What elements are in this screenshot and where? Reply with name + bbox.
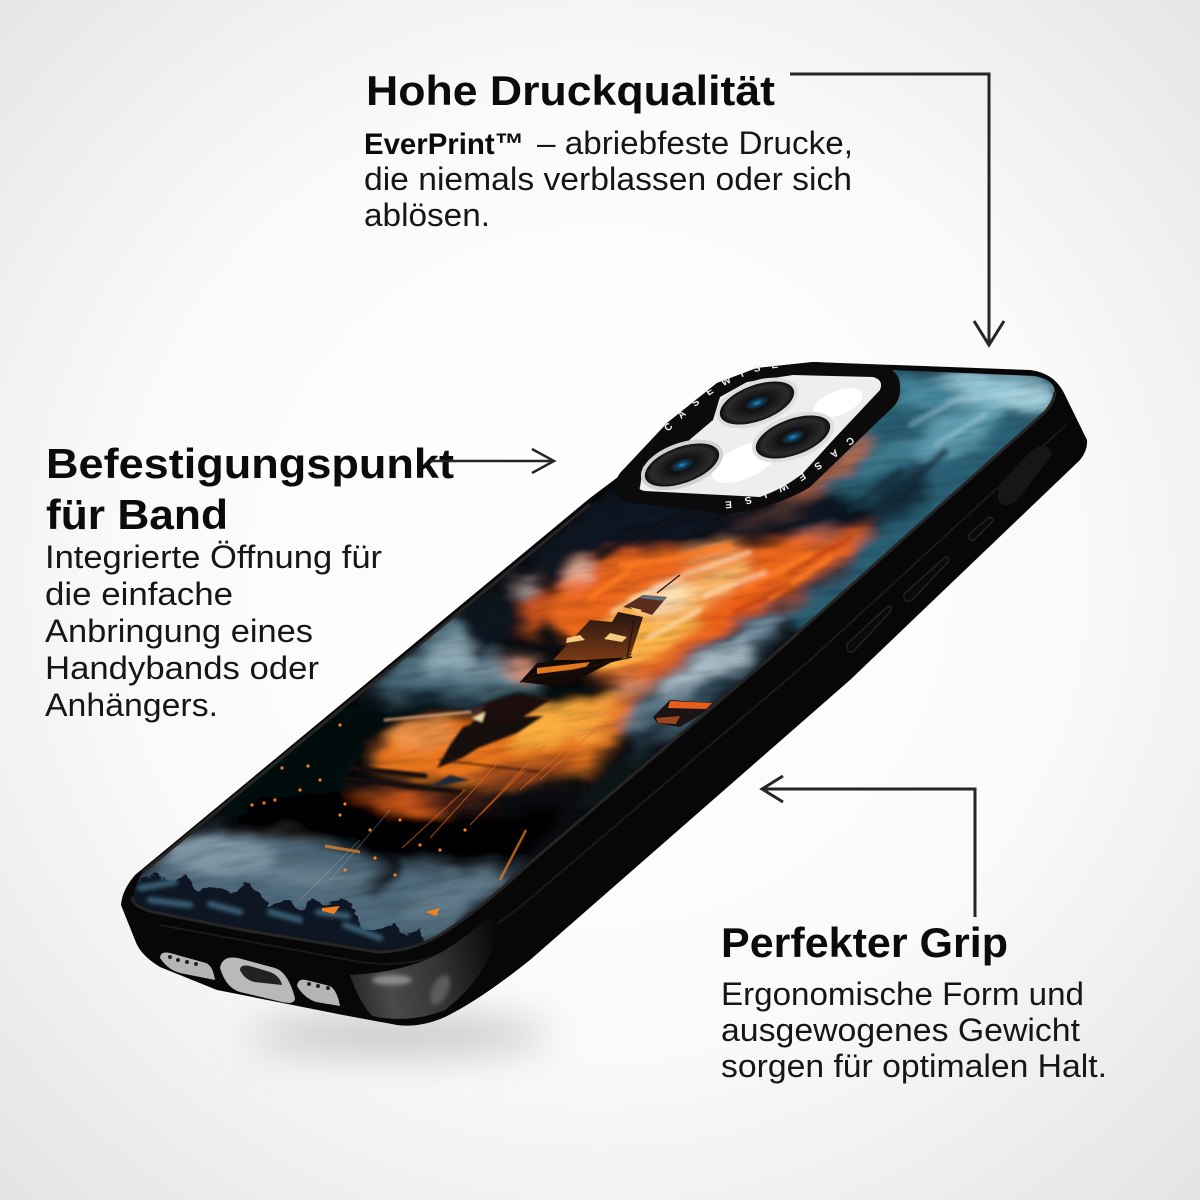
camera island xyxy=(615,361,900,514)
bottom corner gloss xyxy=(350,915,500,1019)
brand lettering: CASEWISE xyxy=(725,438,854,508)
reflected glow xyxy=(372,696,640,785)
body text: ausgewogenes Gewicht xyxy=(721,1012,1080,1048)
brush texture xyxy=(148,371,1052,936)
heading: Hohe Druckqualität xyxy=(366,67,775,114)
heading: für Band xyxy=(46,491,228,538)
side edge highlight xyxy=(160,425,1066,964)
body text: Anbringung eines xyxy=(45,613,313,649)
body text: ablösen. xyxy=(364,197,490,233)
arrow to strap point xyxy=(430,449,554,473)
body text xyxy=(721,976,1107,1084)
left cloud and rock xyxy=(370,612,540,702)
body text: Anhängers. xyxy=(45,687,218,723)
black water xyxy=(215,790,570,860)
sky brush strokes xyxy=(590,392,1040,638)
body text: Handybands oder xyxy=(45,650,319,686)
case body xyxy=(121,362,1087,1026)
heading: Perfekter Grip xyxy=(721,919,1008,966)
callout: print quality xyxy=(364,67,1004,345)
bright sunset xyxy=(540,528,875,688)
camera lenses xyxy=(634,368,841,500)
body text: sorgen für optimalen Halt. xyxy=(721,1048,1107,1084)
body text xyxy=(45,539,382,723)
speaker grille right xyxy=(297,980,340,1006)
teal sky xyxy=(778,370,1055,634)
body text: EverPrint™ xyxy=(364,128,524,161)
phone case xyxy=(121,361,1088,1026)
ship reflection xyxy=(428,694,550,788)
side buttons xyxy=(847,518,992,652)
body text: Ergonomische Form und xyxy=(721,976,1084,1012)
grey sea xyxy=(135,828,535,955)
brand lettering: CASEWISE xyxy=(664,361,778,430)
horizon xyxy=(210,680,628,830)
body text: die niemals verblassen oder sich xyxy=(364,161,852,197)
orange sparks xyxy=(250,723,467,916)
galleon ship xyxy=(520,575,680,687)
waves xyxy=(625,600,790,760)
arrow to case side xyxy=(762,776,975,917)
arrow to print surface xyxy=(790,74,1004,345)
heading xyxy=(46,440,454,538)
callout: grip xyxy=(721,776,1107,1084)
foreground rocks xyxy=(133,872,424,950)
soft colour fields xyxy=(135,360,1065,955)
dark right foreground xyxy=(578,747,650,805)
charging port xyxy=(220,957,295,1003)
phone shadow xyxy=(250,1017,550,1053)
case rim around artwork xyxy=(133,392,1055,952)
speaker grille left xyxy=(160,953,215,980)
camera glass xyxy=(640,375,881,497)
body text xyxy=(364,125,853,233)
callout: strap attachment xyxy=(45,440,554,723)
body text: – abriebfeste Drucke, xyxy=(537,125,853,161)
brand lettering xyxy=(664,361,854,508)
distant ship xyxy=(653,700,712,727)
dark smoke below camera xyxy=(530,478,880,590)
rain streaks xyxy=(300,725,600,900)
switch button xyxy=(998,446,1052,505)
reflection bands xyxy=(345,712,540,792)
printed artwork: ship in a storm at sunset xyxy=(133,370,1055,950)
body text: die einfache xyxy=(45,576,233,612)
body text: Integrierte Öffnung für xyxy=(45,539,382,575)
heading: Befestigungspunkt xyxy=(46,440,454,487)
